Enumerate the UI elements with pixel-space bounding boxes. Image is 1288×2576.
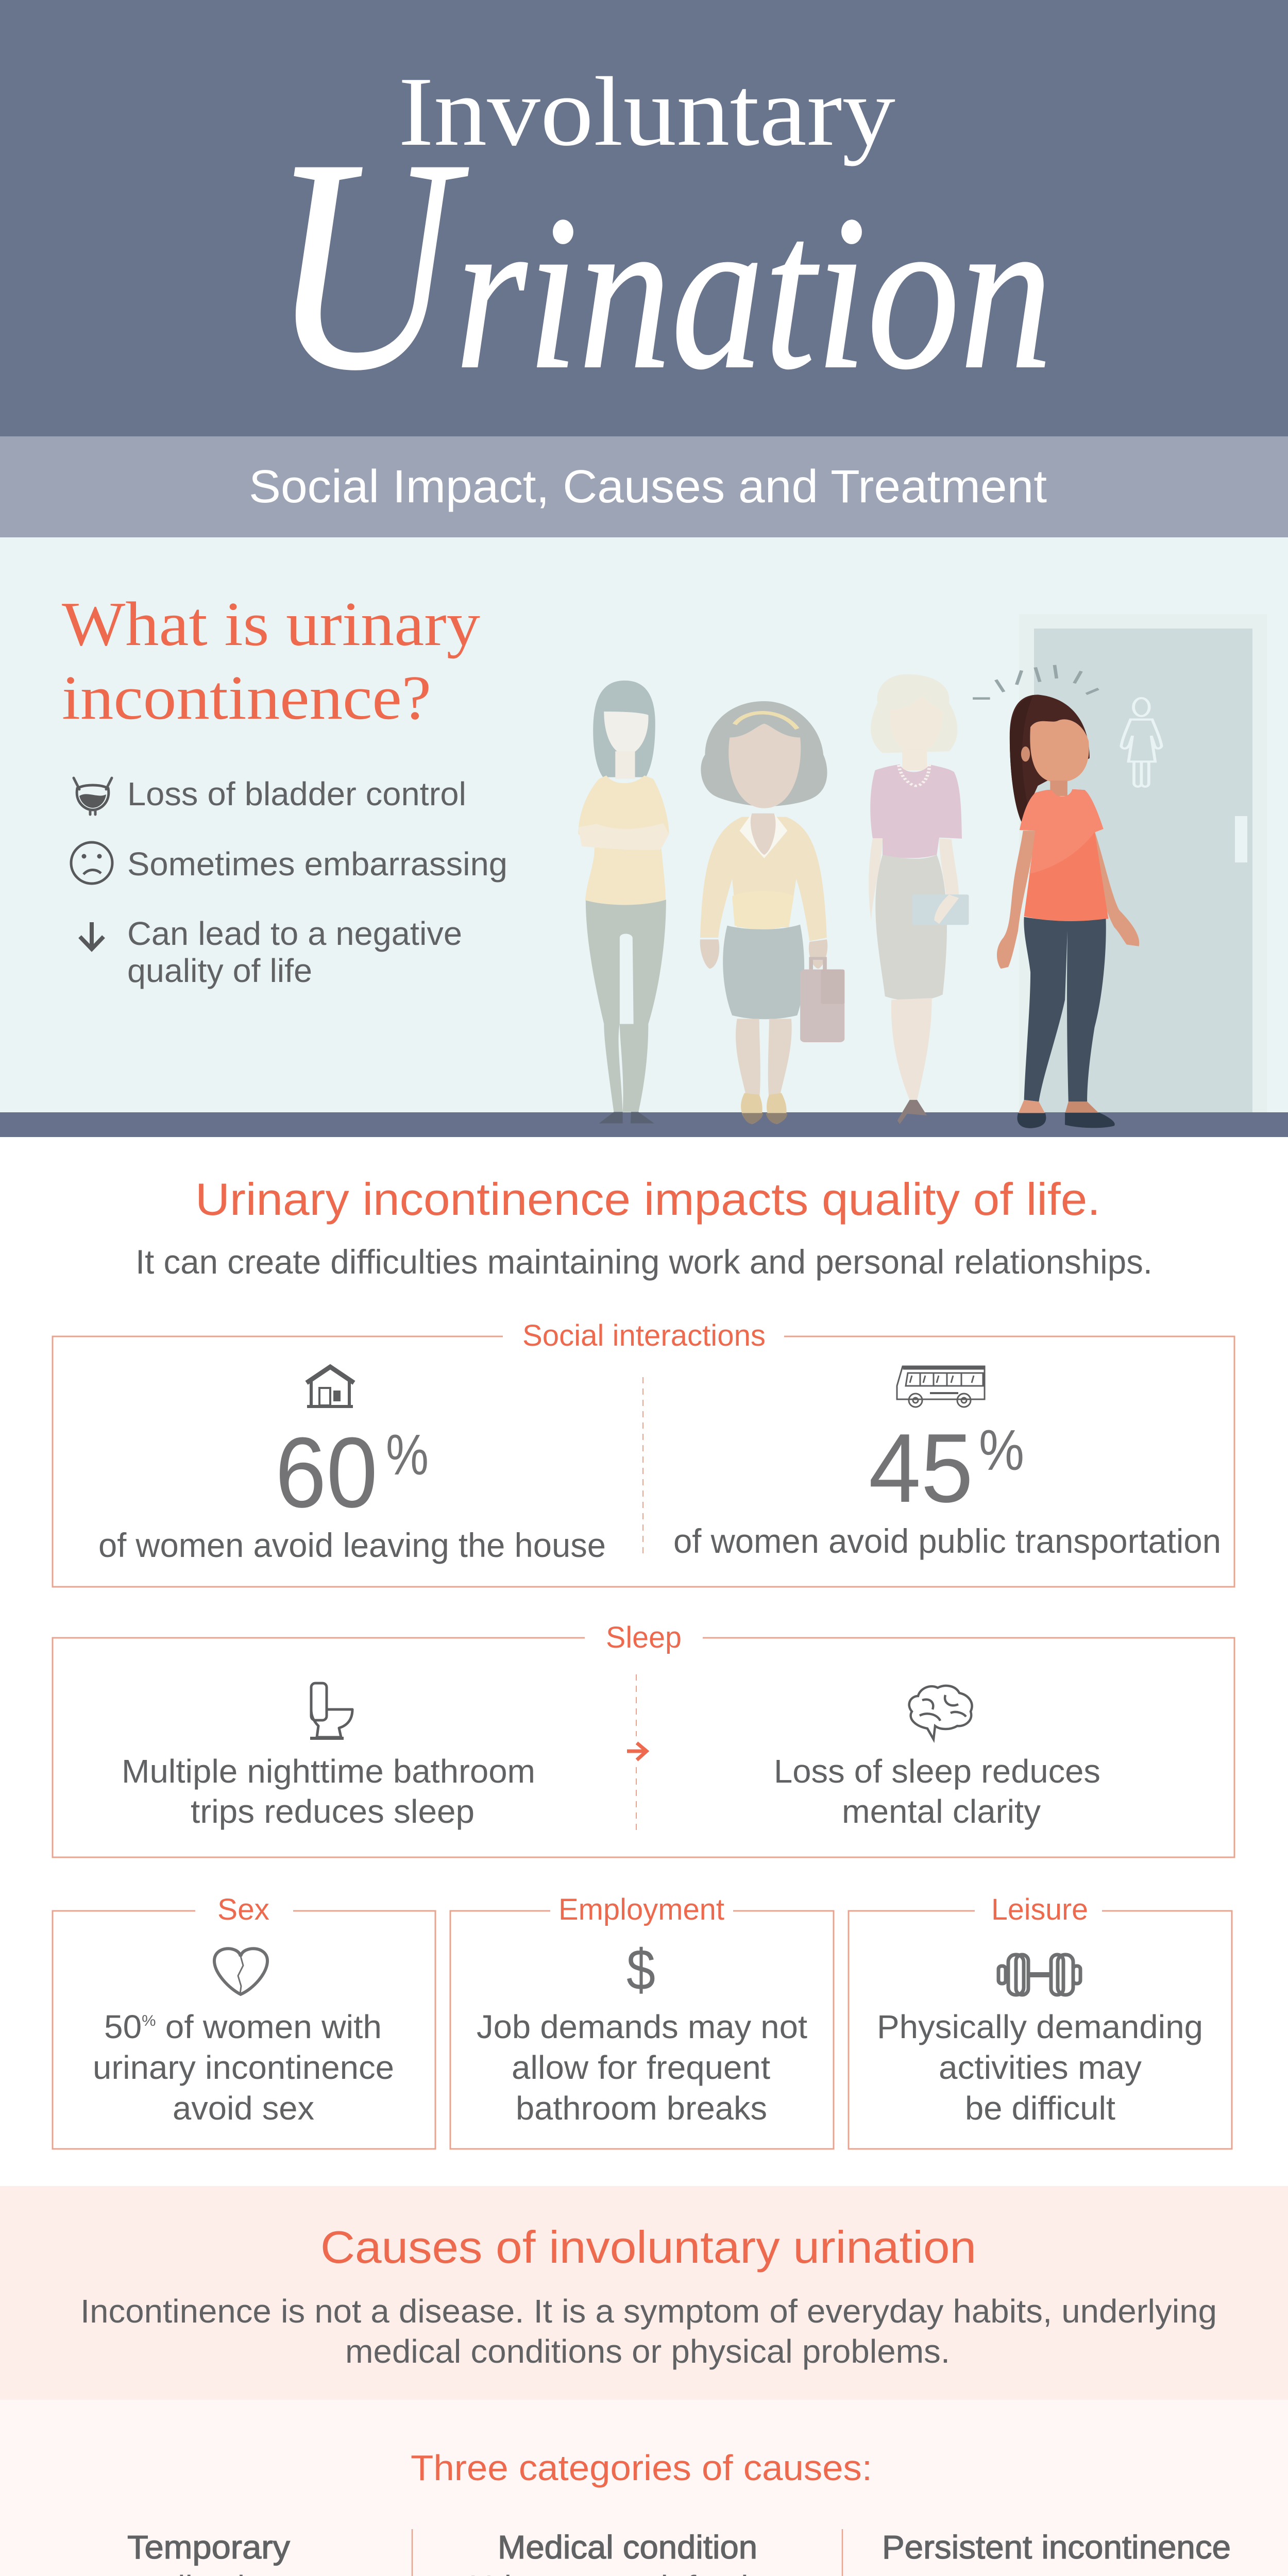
heading: what is urinary incontinence: [62, 589, 480, 733]
icon: dumbbell: [998, 1955, 1080, 1995]
icon: sad face: [71, 842, 112, 884]
text: fifty percent avoid sex: avoid sex: [173, 2090, 314, 2127]
text: job demands: Job demands may not: [477, 2008, 807, 2045]
panel: quality of life: [0, 1137, 1288, 2186]
stat: 60 percent: 60: [275, 1417, 378, 1529]
text: not a disease: Incontinence is not a disease. It is a symptom of everyday habits, underlying: [80, 2293, 1217, 2330]
label: sex: Sex: [217, 1893, 269, 1926]
text: loss of sleep reduces mental clarity: [774, 1753, 1100, 1830]
heading: what is urinary incontinence: incontinence?: [62, 663, 431, 733]
text: fifty percent avoid sex: of women with: [156, 2008, 382, 2045]
panel: what is urinary incontinence: [0, 537, 1288, 1112]
text: physically demanding: Physically demanding: [877, 2008, 1203, 2045]
text: job demands: [477, 2008, 807, 2127]
icon: toilet: [310, 1683, 352, 1738]
panel: causes intro: [0, 2186, 1288, 2400]
icon: door: [1019, 614, 1267, 1112]
label: employment: Employment: [558, 1893, 724, 1926]
panel: social interactions: [53, 1319, 1234, 1587]
text: job demands: bathroom breaks: [516, 2090, 767, 2127]
stat: 45 percent: 45: [869, 1414, 973, 1523]
text: physically demanding: [877, 2008, 1203, 2127]
stat: 60 percent: %: [386, 1423, 429, 1487]
text: fifty percent avoid sex: urinary incontinence: [93, 2049, 394, 2086]
stat: 45 percent: %: [979, 1418, 1024, 1482]
label: social interactions: Social interactions: [522, 1319, 766, 1352]
text: can lead to a negative quality of life: quality of life: [127, 952, 312, 989]
heading: three categories: Three categories of causes:: [411, 2448, 872, 2488]
column: temporary: [84, 2529, 335, 2576]
icon: arrow: [627, 1743, 647, 1760]
panel: sleep: [53, 1621, 1234, 1857]
column: persistent incontinence: Persistent incontinence: [882, 2529, 1231, 2566]
text: avoid public transportation: of women avoid public transportation: [673, 1522, 1221, 1560]
figure: woman at door: [997, 694, 1139, 1128]
icon: brain: [909, 1686, 972, 1739]
heading: what is urinary incontinence: What is urinary: [62, 589, 480, 659]
subtitle bar: [0, 436, 1288, 537]
figure: woman with pearls: [869, 674, 969, 1124]
column: temporary: Temporary: [127, 2529, 290, 2566]
icon: down arrow: [80, 922, 104, 949]
text: physically demanding: activities may: [939, 2049, 1142, 2086]
icon: bladder: [74, 778, 112, 815]
text: sometimes embarrassing: Sometimes embarrassing: [127, 845, 507, 883]
icon: bus: [897, 1366, 985, 1407]
text: avoid leaving the house: of women avoid leaving the house: [98, 1526, 606, 1564]
subtitle bar: Social Impact, Causes and Treatment: [249, 461, 1047, 513]
text: loss of bladder control: Loss of bladder control: [127, 775, 466, 812]
text: not a disease: [80, 2293, 1217, 2370]
text: fifty percent avoid sex: %: [142, 2012, 156, 2029]
icon: restroom sign: [1121, 698, 1162, 787]
icon: house: [307, 1367, 354, 1408]
figure: woman with crossed arms: [578, 681, 669, 1123]
stat: 45 percent: [869, 1414, 1024, 1523]
panel: header: [0, 0, 1288, 436]
column: medical condition: Medical condition: [498, 2529, 757, 2566]
column: medical condition: [469, 2529, 786, 2576]
icon: dollar: $: [626, 1938, 655, 2002]
panel: employment: [450, 1893, 834, 2149]
text: fifty percent avoid sex: 50: [104, 2008, 141, 2045]
text: job demands: allow for frequent: [512, 2049, 770, 2086]
icon: broken heart: [214, 1948, 267, 1994]
icon: alert ticks: [973, 665, 1098, 699]
figures: waiting women: [578, 665, 1162, 1128]
panel: three categories: [0, 2400, 1288, 2576]
heading: quality of life: Urinary incontinence impacts quality of life.: [195, 1174, 1100, 1225]
title: Urination script: Urination: [271, 96, 1053, 433]
text: loss of sleep reduces mental clarity: mental clarity: [842, 1793, 1041, 1830]
label: sleep: Sleep: [606, 1621, 682, 1654]
label: leisure: Leisure: [991, 1893, 1088, 1926]
floor: [0, 1112, 1288, 1137]
text: multiple nighttime bathroom trips: [122, 1753, 535, 1830]
heading: causes: Causes of involuntary urination: [320, 2222, 976, 2273]
panel: sex: [53, 1893, 435, 2149]
figure: woman with briefcase: [700, 701, 844, 1124]
text: can lead to a negative quality of life: Can lead to a negative: [127, 915, 462, 952]
text: fifty percent avoid sex: [93, 2008, 394, 2127]
text: multiple nighttime bathroom trips: Multiple nighttime bathroom: [122, 1753, 535, 1790]
text: difficulties: It can create difficulties maintaining work and personal relationships.: [135, 1243, 1153, 1281]
text: loss of sleep reduces mental clarity: Loss of sleep reduces: [774, 1753, 1100, 1790]
text: can lead to a negative quality of life: [127, 915, 462, 989]
text: physically demanding: be difficult: [965, 2090, 1115, 2127]
text: not a disease: medical conditions or physical problems.: [345, 2333, 950, 2370]
panel: leisure: [849, 1893, 1232, 2149]
title: Involuntary: Involuntary: [398, 57, 895, 166]
text: multiple nighttime bathroom trips: trips reduces sleep: [191, 1793, 474, 1830]
